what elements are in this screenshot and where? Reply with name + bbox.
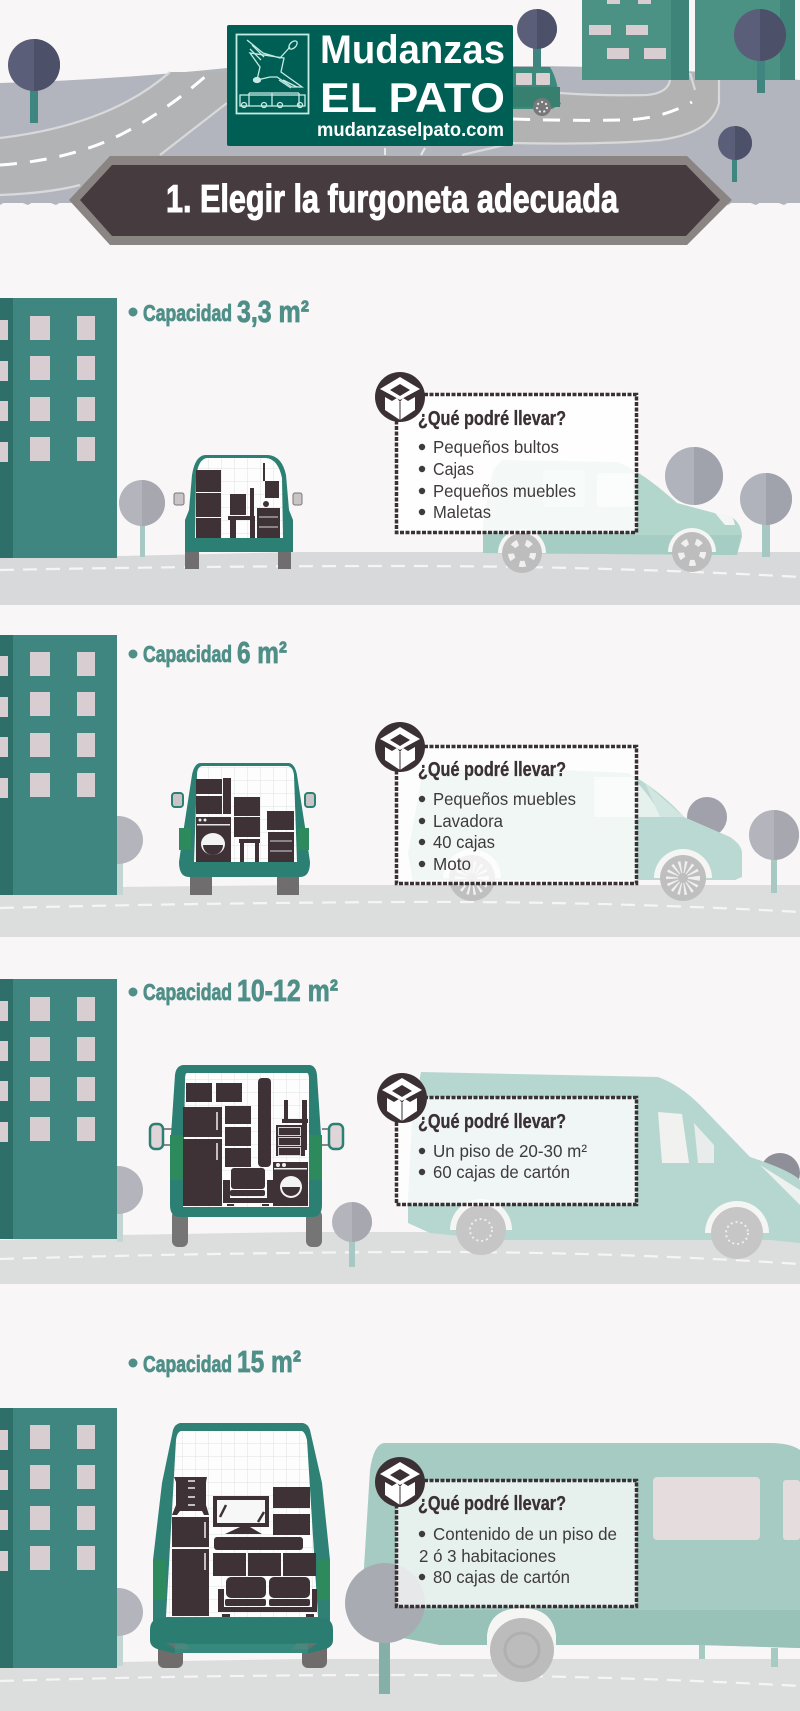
panel: capacity 3,3 m2 xyxy=(0,294,800,605)
trees xyxy=(687,797,799,893)
callout text: 80 cajas de cartón xyxy=(433,1567,570,1587)
callout text: ¿Qué podré llevar? xyxy=(418,1111,566,1133)
tree in front of van xyxy=(345,1563,425,1694)
callout text: Contenido de un piso de xyxy=(433,1524,617,1544)
van rear view with load xyxy=(150,1065,343,1247)
callout: what can I carry xyxy=(375,372,636,532)
callout text: Lavadora xyxy=(433,811,503,831)
capacity label: 6 m² xyxy=(237,635,287,670)
capacity label: 15 m² xyxy=(237,1344,301,1379)
icon: open box xyxy=(375,1457,425,1507)
logo text: Mudanzas xyxy=(320,28,505,72)
callout text xyxy=(418,1111,587,1182)
callout text xyxy=(418,1493,617,1587)
capacity label: Capacidad xyxy=(143,979,232,1005)
van rear view with load xyxy=(150,1423,333,1668)
tree in front of van xyxy=(665,447,723,505)
callout text: Pequeños muebles xyxy=(433,789,576,809)
tree behind building xyxy=(93,816,143,895)
callout text: ¿Qué podré llevar? xyxy=(418,408,566,430)
callout text: 60 cajas de cartón xyxy=(433,1162,570,1182)
van rear view with load xyxy=(174,455,302,569)
logo text: EL PATO xyxy=(320,74,505,121)
van side view xyxy=(362,1443,800,1682)
callout text: Moto xyxy=(433,854,471,874)
road xyxy=(0,1659,800,1711)
callout text: 40 cajas xyxy=(433,832,495,852)
capacity label: 3,3 m² xyxy=(237,294,309,329)
road xyxy=(0,1232,800,1284)
callout text xyxy=(418,759,576,874)
panel: capacity 10-12 m2 xyxy=(0,973,800,1284)
van side view xyxy=(483,460,742,573)
logo: Mudanzas El Pato xyxy=(227,25,513,146)
icon: open box xyxy=(377,1073,427,1123)
small van xyxy=(513,67,561,116)
panel: capacity 6 m2 xyxy=(0,635,800,937)
capacity label: Capacidad xyxy=(143,1351,232,1377)
building xyxy=(0,1408,117,1668)
callout: what can I carry xyxy=(375,1457,636,1606)
panel: capacity 15 m2 xyxy=(0,1344,800,1711)
callout text: Pequeños muebles xyxy=(433,481,576,501)
logo emblem: duck and truck xyxy=(236,34,308,114)
van rear view with load xyxy=(172,763,315,895)
van side view xyxy=(408,1072,800,1259)
callout text: ¿Qué podré llevar? xyxy=(418,759,566,781)
trees xyxy=(8,9,786,182)
road xyxy=(0,552,800,605)
building xyxy=(0,979,117,1239)
tree behind building xyxy=(93,1166,143,1242)
capacity label: Capacidad xyxy=(143,300,232,326)
capacity label xyxy=(128,294,309,329)
icon: open box xyxy=(375,372,425,422)
logo text: mudanzaselpato.com xyxy=(317,120,504,141)
callout text: Pequeños bultos xyxy=(433,437,559,457)
van side view xyxy=(408,770,742,901)
trees xyxy=(119,473,792,557)
title banner: 1. Elegir la furgoneta adecuada xyxy=(166,178,618,221)
callout text: Maletas xyxy=(433,502,491,522)
callout text xyxy=(418,408,576,522)
capacity label xyxy=(128,1344,301,1379)
title banner xyxy=(69,156,732,245)
callout text: 2 ó 3 habitaciones xyxy=(419,1546,556,1566)
hill and road xyxy=(0,66,800,211)
callout: what can I carry xyxy=(377,1073,636,1204)
buildings top right xyxy=(582,0,795,80)
trees xyxy=(332,1153,800,1267)
callout text: ¿Qué podré llevar? xyxy=(418,1493,566,1515)
capacity label: Capacidad xyxy=(143,641,232,667)
logo text xyxy=(317,28,505,141)
capacity label: 10-12 m² xyxy=(237,973,338,1008)
callout text: Un piso de 20-30 m² xyxy=(433,1141,587,1161)
callout text: Cajas xyxy=(433,459,474,479)
header road scene xyxy=(0,0,800,211)
building xyxy=(0,635,117,895)
road xyxy=(0,885,800,937)
icon: open box xyxy=(375,722,425,772)
callout: what can I carry xyxy=(375,722,636,884)
building xyxy=(0,298,117,558)
capacity label xyxy=(128,635,287,670)
tree behind building xyxy=(93,1588,143,1666)
capacity label xyxy=(128,973,338,1008)
